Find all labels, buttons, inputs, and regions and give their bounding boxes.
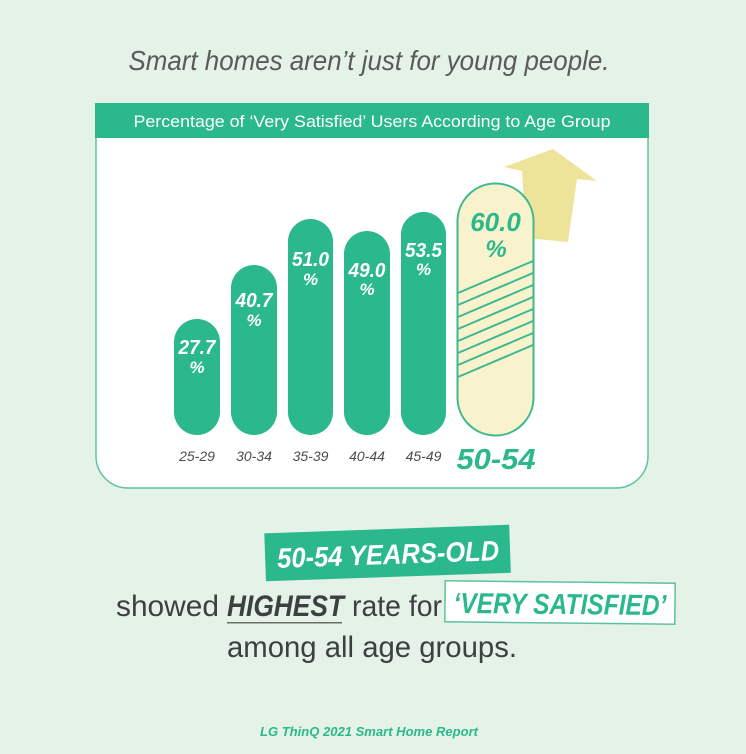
bar: 45-49: % [416, 260, 431, 279]
bar: 30-34: % [246, 311, 262, 330]
bar: 45-49: 45-49 [406, 448, 442, 464]
bar: 40-44 [344, 231, 390, 464]
text: showed highest rate for: showed [116, 590, 219, 623]
bar: 30-34 [231, 265, 277, 464]
bar: 25-29 [174, 319, 220, 464]
bar: 40-44: % [359, 280, 375, 299]
bar: 25-29: % [189, 358, 205, 377]
title: Smart homes aren’t just for young people. [128, 45, 610, 76]
bar: 50-54 highlighted: % [485, 236, 507, 263]
bar: 30-34: 40.7 [235, 290, 273, 312]
bar: 40-44: 49.0 [348, 260, 386, 282]
callout: 50-54 years-old [264, 525, 511, 581]
panel header [95, 103, 649, 138]
panel: chart [95, 103, 649, 488]
source: LG ThinQ 2021 Smart Home Report [260, 724, 479, 739]
text: showed highest rate for [116, 590, 442, 624]
bar: 50-54 highlighted [456, 184, 536, 476]
bar: 35-39: 35-39 [293, 448, 329, 464]
bar: 25-29: 25-29 [178, 448, 215, 464]
bar: 45-49: 53.5 [405, 240, 443, 262]
bar: 30-34: 30-34 [236, 448, 272, 464]
bar: 35-39: % [303, 270, 318, 289]
callout: very satisfied: ‘VERY SATISFIED’ [453, 588, 667, 622]
arrow: upward trend [504, 149, 597, 242]
bar: 40-44: 40-44 [349, 448, 385, 464]
bar: 35-39: 51.0 [292, 249, 329, 271]
bar: 45-49 [401, 212, 446, 464]
bar: 50-54 highlighted: 50-54 [456, 444, 536, 476]
bar: 50-54 highlighted: 60.0 [470, 207, 521, 237]
callout: very satisfied [445, 581, 675, 624]
text: showed highest rate for: HIGHEST [227, 590, 346, 623]
text: among all age groups: among all age groups. [227, 631, 517, 664]
bar: 35-39 [288, 219, 333, 464]
text: showed highest rate for: rate for [352, 590, 442, 623]
bar: 25-29: 27.7 [178, 337, 216, 359]
panel header: Percentage of ‘Very Satisfied’ Users According to Age Group [134, 112, 610, 131]
hatch stripes [458, 261, 533, 377]
callout: 50-54 years-old: 50-54 YEARS-OLD [277, 535, 500, 574]
